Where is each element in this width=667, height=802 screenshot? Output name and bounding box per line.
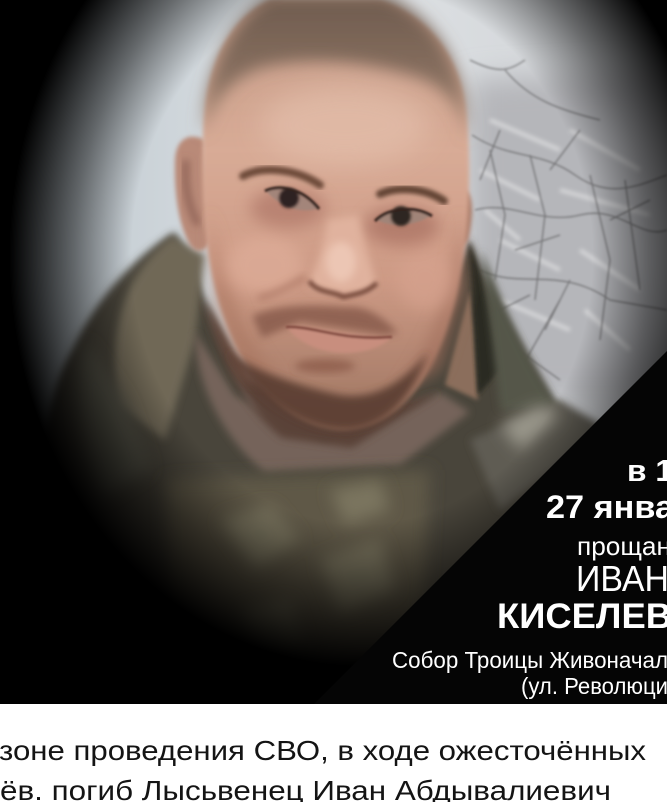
article text bbox=[0, 735, 646, 802]
right eye bbox=[375, 206, 432, 226]
hair stubble bbox=[203, 0, 469, 140]
moustache bbox=[252, 306, 398, 338]
right chest folds bbox=[470, 400, 610, 510]
eye sockets bbox=[250, 188, 326, 228]
eyebrows bbox=[243, 170, 320, 185]
surname: КИСЕЛЕВ bbox=[497, 597, 667, 636]
jacket bbox=[49, 228, 599, 658]
photo: portrait scene bbox=[14, 0, 667, 654]
right ear bbox=[463, 191, 475, 244]
left eye bbox=[265, 188, 319, 210]
mouth bbox=[286, 326, 392, 353]
beard bbox=[228, 352, 428, 430]
shirt collar bbox=[195, 332, 470, 472]
head bbox=[175, 0, 472, 430]
black corner triangle bbox=[374, 351, 667, 646]
face bbox=[202, 0, 469, 430]
article line 1: зоне проведения СВО, в ходе ожесточённых bbox=[0, 735, 646, 766]
left ear bbox=[175, 137, 210, 251]
announcement text bbox=[392, 453, 667, 699]
cheek shading bbox=[204, 249, 262, 376]
photo background: winter sky and branches bbox=[14, 0, 667, 426]
neck bbox=[205, 300, 440, 448]
jacket collar left bbox=[115, 236, 205, 440]
date line: 27 янва bbox=[546, 489, 667, 525]
nose bbox=[258, 215, 377, 298]
jacket collar right bbox=[445, 290, 478, 400]
camouflage shirt bbox=[169, 468, 432, 610]
